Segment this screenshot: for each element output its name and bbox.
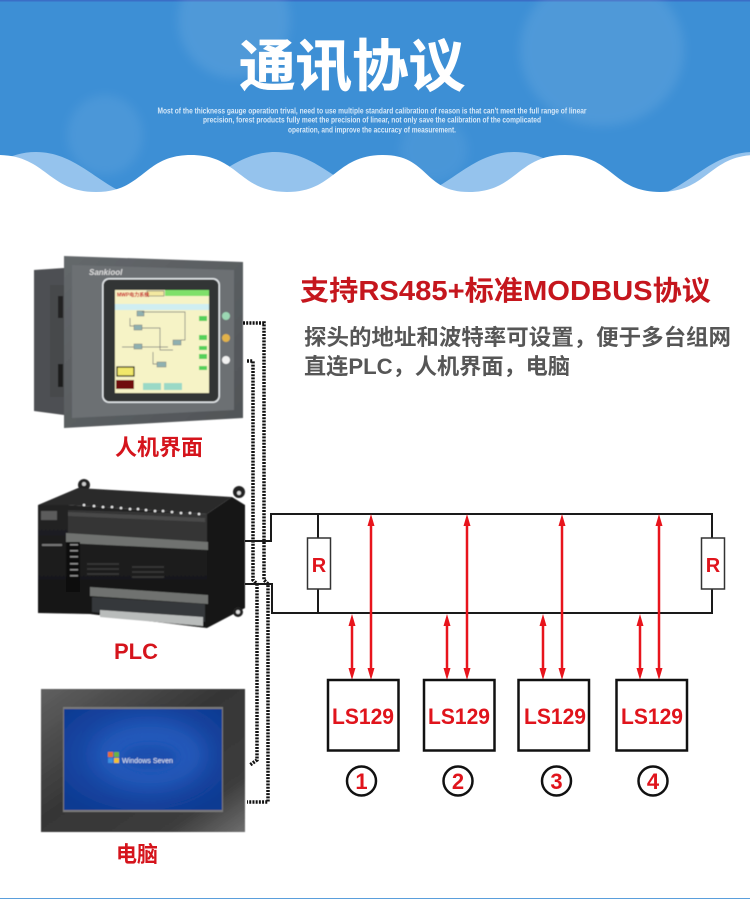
device: HMI touch panel	[34, 256, 243, 428]
description text block	[304, 325, 731, 379]
heading: protocol support: 支持RS485+标准MODBUS协议	[300, 275, 712, 306]
device: HMI touch panel: Sankiool	[89, 268, 123, 277]
sensor node 3	[518, 680, 589, 796]
label: PLC: PLC	[114, 639, 158, 664]
resistor right	[702, 538, 724, 589]
device: PLC controller	[38, 479, 245, 628]
label: HMI: 人机界面	[115, 435, 203, 460]
sensor node 1: LS129	[332, 704, 394, 729]
RS485 bus wiring	[245, 514, 712, 613]
label: computer: 电脑	[116, 842, 158, 867]
sensor node 4: LS129	[621, 704, 683, 729]
sensor node 2: 2	[452, 769, 464, 794]
sensor node 2	[424, 680, 494, 796]
device: HMI touch panel: MWP电力系统	[117, 292, 149, 298]
sensor node 3: LS129	[524, 704, 586, 729]
device: industrial PC: Windows Seven	[122, 756, 173, 765]
sensor node 1: 1	[355, 769, 368, 794]
sensor node 1	[328, 680, 398, 796]
device: industrial PC	[41, 689, 245, 832]
sensor node 4	[616, 680, 687, 796]
red signal arrows	[348, 514, 662, 680]
resistor right: R	[706, 555, 721, 577]
subtitle text block: precision, forest products fully meet the precision of linear, not only save the calibration of the complicated	[203, 116, 541, 124]
resistor left: R	[312, 555, 327, 577]
dotted serial cables	[243, 323, 268, 802]
decorative light wave layer	[0, 152, 750, 205]
subtitle text block	[158, 106, 586, 134]
subtitle text block: Most of the thickness gauge operation trival, need to use multiple standard calibration of reason is that can't meet the full range of linear	[158, 106, 586, 116]
resistor left	[308, 538, 330, 589]
subtitle text block: operation, and improve the accuracy of measurement.	[288, 126, 456, 134]
title: 通讯协议	[239, 35, 465, 98]
description text block: 探头的地址和波特率可设置，便于多台组网	[304, 325, 731, 350]
panel: blue header banner	[0, 0, 750, 205]
description text block: 直连PLC，人机界面，电脑	[304, 354, 570, 379]
sensor node 4: 4	[647, 769, 660, 794]
sensor node 2: LS129	[428, 704, 490, 729]
sensor node 3: 3	[550, 769, 563, 794]
